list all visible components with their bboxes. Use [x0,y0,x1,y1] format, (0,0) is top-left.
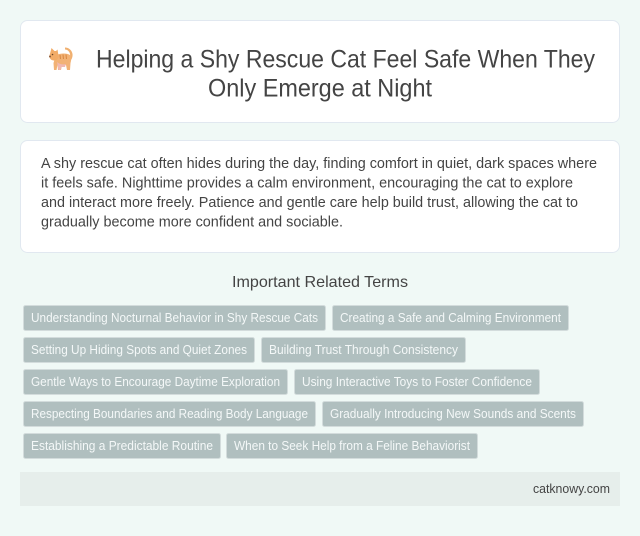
chip: daytime exploration [24,370,288,394]
chip: safe environment: Creating a Safe and Calming Environment [340,311,561,325]
summary text [41,155,597,230]
chip: interactive toys [294,370,540,394]
footer source: catknowy.com [533,482,610,496]
chip: safe environment [332,306,568,330]
chip: daytime exploration: Gentle Ways to Encourage Daytime Exploration [31,375,280,389]
chip: behaviorist [226,434,478,458]
title panel [20,20,620,122]
chip: routine [24,434,220,458]
summary text: and interact more freely. Patience and gentle care help build trust, allowing the cat to [41,194,578,211]
chip: routine: Establishing a Predictable Routine [31,439,213,453]
chip: hiding spots [24,338,254,362]
chip: interactive toys: Using Interactive Toys to Foster Confidence [302,375,532,389]
chip: nocturnal behavior [24,306,326,330]
title text [96,46,595,102]
chip: sounds and scents [322,402,584,426]
chip: body language [24,402,316,426]
summary text: A shy rescue cat often hides during the day, finding comfort in quiet, dark spaces where [41,155,597,172]
chip: behaviorist: When to Seek Help from a Feline Behaviorist [234,439,470,453]
chip: body language: Respecting Boundaries and Reading Body Language [31,407,308,421]
chip: hiding spots: Setting Up Hiding Spots and Quiet Zones [31,343,247,357]
chip: nocturnal behavior: Understanding Nocturnal Behavior in Shy Rescue Cats [31,311,318,325]
section heading: Important Related Terms [232,274,408,291]
summary text: it feels safe. Nighttime provides a calm environment, encouraging the cat to explore [41,174,573,192]
chip: building trust [262,338,466,362]
icon: cat [49,48,73,70]
footer bar [20,472,620,506]
title text: Helping a Shy Rescue Cat Feel Safe When They [96,46,595,74]
summary text: gradually become more confident and sociable. [41,214,343,230]
chip: building trust: Building Trust Through Consistency [269,343,459,357]
related terms chips [24,306,584,458]
summary panel [20,140,620,252]
title text: Only Emerge at Night [208,74,432,102]
chip: sounds and scents: Gradually Introducing New Sounds and Scents [330,407,576,421]
